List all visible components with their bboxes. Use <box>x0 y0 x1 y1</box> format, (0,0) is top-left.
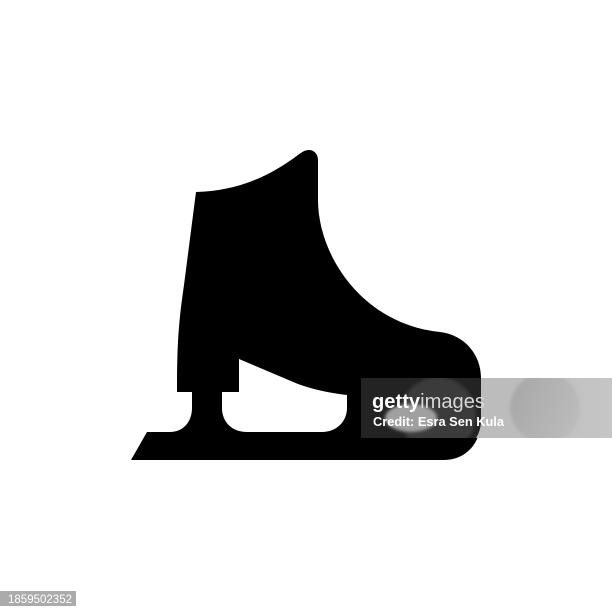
watermark band <box>361 378 612 438</box>
watermark credit text: Credit: Esra Sen Kula <box>373 415 505 429</box>
icon: ice skate boot <box>131 150 481 460</box>
watermark blurred shape on dark area <box>385 404 437 432</box>
watermark logo text: gettyimages <box>372 390 485 413</box>
watermark dark circle <box>402 378 476 438</box>
image id label <box>0 591 76 606</box>
image id label: 1859502352 <box>8 594 72 606</box>
watermark blurred orb <box>510 378 578 438</box>
